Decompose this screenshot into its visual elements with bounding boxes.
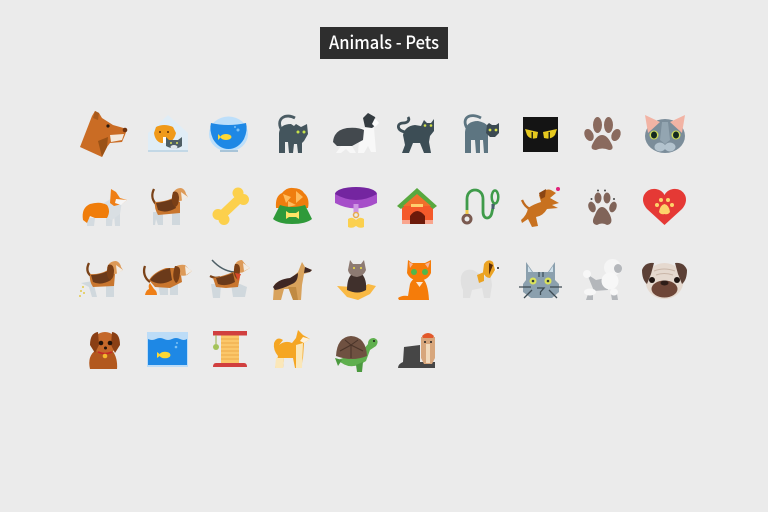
icon: pet food bowl <box>273 188 312 224</box>
icon: jumping dog <box>521 187 560 227</box>
icon: cat scratching post <box>213 331 247 367</box>
icon: yorkshire terrier <box>398 333 435 368</box>
icon: doghouse <box>397 188 437 224</box>
icon: orange cat <box>398 260 431 300</box>
icon: papillon <box>461 260 499 298</box>
icon: pug face <box>642 263 687 299</box>
icon: aquarium <box>147 332 188 367</box>
icon: beagle peeing <box>79 261 123 297</box>
icon: purple collar <box>335 187 377 228</box>
icon: beagle pooping <box>144 265 192 295</box>
icon: grey cat face <box>645 115 685 153</box>
icon: cat in hands <box>337 260 376 300</box>
icon: border collie <box>333 113 379 153</box>
icon: turtle <box>335 336 378 372</box>
icon: leash <box>463 190 498 223</box>
icon: poodle <box>583 259 622 300</box>
icon: pixel cat <box>519 262 562 298</box>
icon: pets in house <box>148 115 188 152</box>
icon: cat eyes in dark <box>523 117 558 152</box>
icon grid <box>79 111 687 372</box>
icon: german shepherd <box>273 262 312 300</box>
icon: arched black cat <box>279 116 308 153</box>
title: Animals - Pets <box>329 29 439 55</box>
icon: corgi <box>83 189 127 226</box>
icon: brown puppy <box>89 332 120 369</box>
icon: walking black cat <box>398 117 434 153</box>
icon: arched grey cat <box>465 116 499 153</box>
icon: paw print <box>582 117 623 150</box>
icon: fishbowl <box>209 116 248 152</box>
icon: heart with paw <box>643 189 686 225</box>
icon: beagle on leash <box>210 260 250 298</box>
icon: paw print with claws <box>587 190 618 225</box>
icon: bone <box>212 188 249 225</box>
icon: shiba inu <box>274 330 310 368</box>
icon: beagle <box>152 188 188 225</box>
icon: dog head <box>80 111 127 157</box>
